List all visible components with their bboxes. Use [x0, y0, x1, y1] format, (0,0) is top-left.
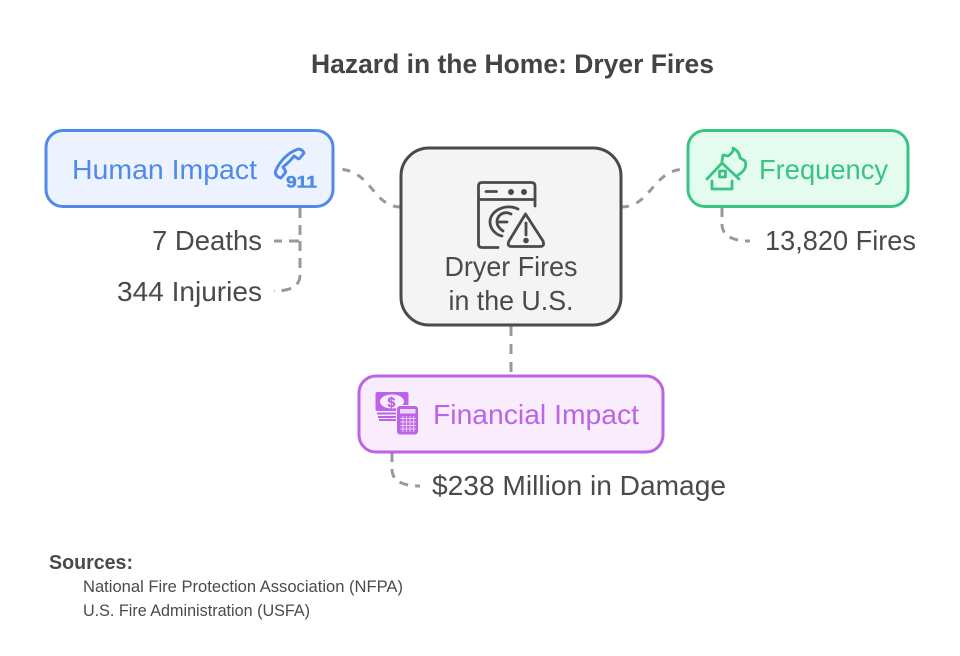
text: 344 injuries: 344 Injuries	[117, 276, 262, 307]
sources block	[49, 552, 403, 620]
connector: center to financial impact	[510, 326, 512, 374]
frequency label: Frequency	[759, 154, 888, 185]
connector: human impact to injuries	[274, 241, 300, 291]
connector: human impact to deaths	[274, 208, 300, 241]
connector: center to human impact	[337, 169, 401, 207]
panel: frequency	[688, 130, 908, 206]
center label: Dryer Fires	[444, 251, 578, 282]
panel: dryer fires center: in the U.S.	[448, 285, 574, 316]
sources block: Sources:	[49, 552, 133, 574]
icon: money and calculator: $	[388, 394, 396, 410]
icon: burning house	[707, 148, 746, 189]
financial impact label: Financial Impact	[433, 399, 639, 430]
panel: human impact	[46, 130, 333, 206]
panel: dryer fires center	[401, 148, 621, 325]
connector: frequency to fires	[722, 208, 750, 241]
text: 7 deaths: 7 Deaths	[152, 225, 262, 256]
text: 13,820 fires: 13,820 Fires	[765, 225, 916, 256]
connector: financial impact to damage	[392, 453, 420, 486]
icon: phone 911	[275, 149, 317, 192]
icon: dryer with warning	[478, 182, 544, 248]
title: Hazard in the Home: Dryer Fires	[311, 49, 714, 79]
human impact label: Human Impact	[72, 154, 257, 185]
icon: phone 911: 911	[286, 172, 317, 192]
sources block: U.S. Fire Administration (USFA)	[83, 601, 310, 620]
panel: financial impact	[359, 376, 663, 452]
icon: money and calculator	[376, 392, 418, 435]
connector: center to frequency	[621, 169, 686, 207]
text: damage: $238 Million in Damage	[432, 470, 726, 501]
sources block: National Fire Protection Association (NFPA)	[83, 577, 403, 596]
